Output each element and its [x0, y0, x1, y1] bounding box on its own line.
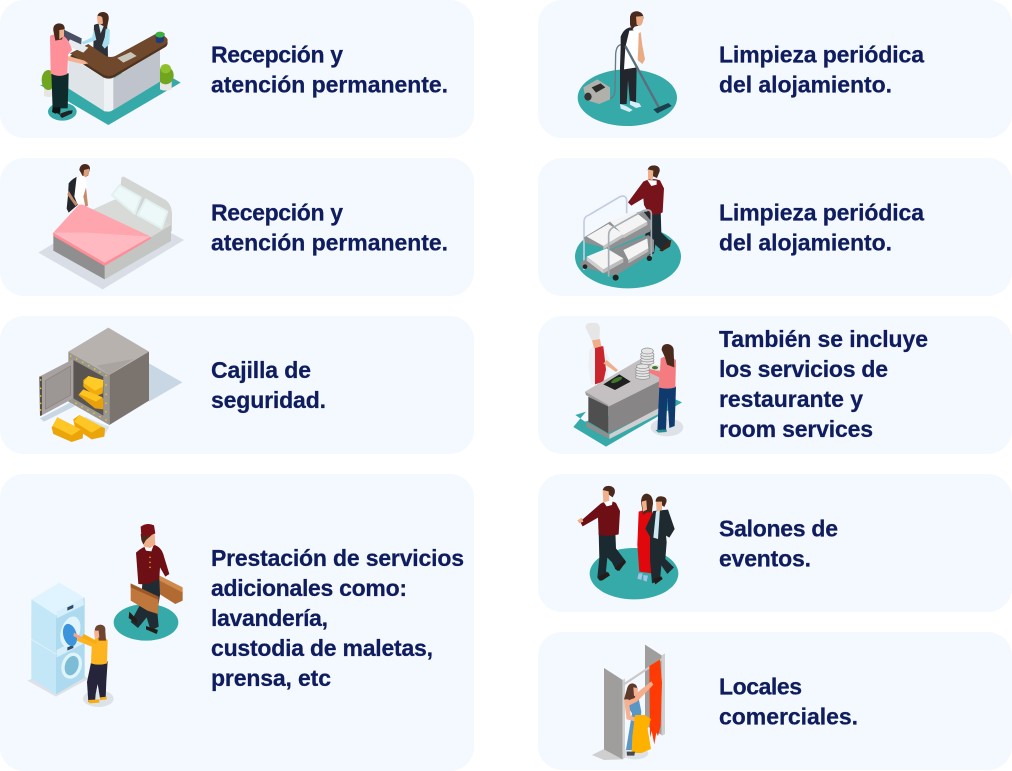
text: limpieza periódica: del alojamiento. — [719, 230, 892, 256]
text: restaurante y room services — [719, 326, 928, 442]
text: limpieza periódica: Limpieza periódica — [719, 200, 924, 226]
text: salones de eventos: eventos. — [719, 546, 811, 572]
panel: cajilla de seguridad — [0, 316, 474, 454]
text: cajilla de seguridad: Cajilla de — [211, 357, 311, 383]
text: prestación de servicios: lavandería, — [211, 605, 328, 631]
panel: servicios adicionales — [0, 474, 474, 771]
text: recepción y atención: Recepción y — [211, 42, 343, 68]
panel: restaurante — [538, 316, 1012, 454]
text: locales comerciales: comerciales. — [719, 704, 858, 730]
text: restaurante y room services: restaurante y — [719, 386, 863, 412]
icon: housekeeper with vacuum — [578, 11, 677, 126]
text: recepción y atención: atención permanente. — [211, 230, 448, 256]
text: salones de eventos — [719, 516, 838, 572]
icon: chef and customer at counter — [573, 323, 683, 447]
text: limpieza periódica — [719, 200, 924, 256]
text: cajilla de seguridad — [211, 357, 326, 413]
text: cajilla de seguridad: seguridad. — [211, 387, 326, 413]
panel: limpieza periódica con carro — [538, 158, 1012, 296]
panel: salones de eventos — [538, 474, 1012, 612]
text: prestación de servicios: prensa, etc — [211, 665, 331, 691]
text: prestación de servicios: custodia de maletas, — [211, 635, 433, 661]
text: limpieza periódica — [719, 42, 924, 98]
icon: fitting room — [592, 645, 665, 760]
text: recepción y atención — [211, 42, 448, 98]
text: recepción y atención: atención permanente. — [211, 72, 448, 98]
text: prestación de servicios: adicionales como: — [211, 575, 407, 601]
text: restaurante y room services: También se incluye — [719, 326, 928, 352]
text: restaurante y room services: room services — [719, 416, 873, 442]
panel: limpieza periódica — [538, 0, 1012, 138]
icon: housekeeper making bed — [38, 164, 184, 289]
text: locales comerciales — [719, 674, 858, 730]
text: limpieza periódica: Limpieza periódica — [719, 42, 924, 68]
icon: safe with gold bars — [39, 328, 182, 442]
panel: habitación — [0, 158, 474, 296]
text: salones de eventos: Salones de — [719, 516, 838, 542]
text: locales comerciales: Locales — [719, 674, 802, 700]
text: prestación de servicios: Prestación de servicios — [211, 545, 464, 571]
icon: reception desk — [40, 12, 181, 125]
icon: porter with laundry cart — [575, 165, 681, 288]
panel: locales comerciales — [538, 632, 1012, 770]
text: limpieza periódica: del alojamiento. — [719, 72, 892, 98]
text: recepción y atención — [211, 200, 448, 256]
text: restaurante y room services: los servicios de — [719, 356, 888, 382]
text: prestación de servicios — [211, 545, 464, 691]
icon: porter and couple — [577, 486, 678, 599]
icon: bellboy with suitcases and laundry — [27, 524, 183, 707]
panel: recepción — [0, 0, 474, 138]
text: recepción y atención: Recepción y — [211, 200, 343, 226]
